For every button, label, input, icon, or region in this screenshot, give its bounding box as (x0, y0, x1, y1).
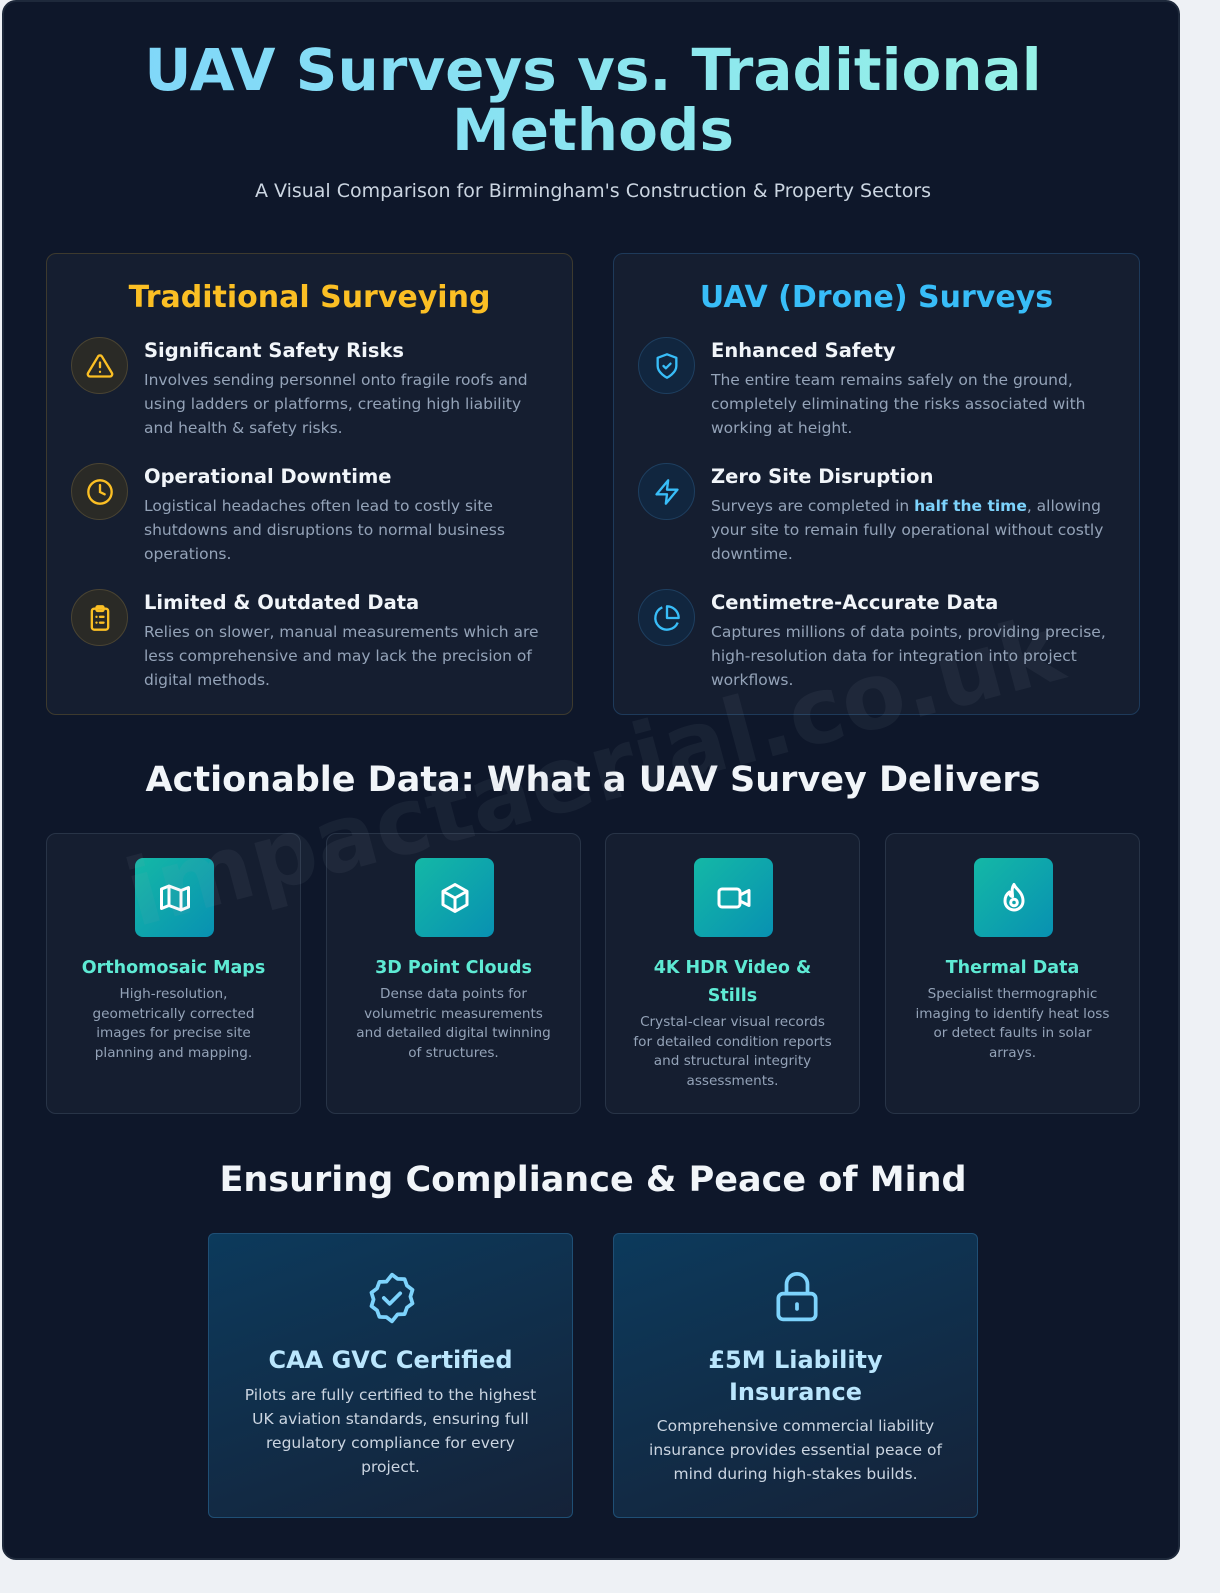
item: outdated data (71, 589, 539, 689)
card: liability insurance: Insurance (729, 1378, 862, 1406)
item: accurate data: Centimetre-Accurate Data (711, 591, 998, 614)
icon: flame (974, 858, 1053, 937)
card: liability insurance: £5M Liability (708, 1346, 883, 1374)
icon: map (135, 858, 214, 937)
card: thermal: Specialist thermographic imaging to identify heat loss or detect faults in solar arrays. (916, 986, 1109, 1061)
icon: video camera (694, 858, 773, 937)
item: outdated data: Limited & Outdated Data (144, 591, 419, 614)
title (4, 40, 1182, 160)
item: zero disruption: Surveys are completed in half the time, allowing your site to remain fully operational without costly downtime. (711, 497, 1103, 563)
item: enhanced safety (638, 337, 1085, 437)
subtitle: A Visual Comparison for Birmingham's Construction & Property Sectors (255, 180, 931, 202)
heading: traditional: Traditional Surveying (129, 280, 490, 315)
title: Methods (452, 96, 734, 164)
item: downtime: Logistical headaches often lead to costly site shutdowns and disruptions to normal business operations. (144, 497, 505, 563)
card: video (605, 833, 860, 1114)
card: thermal: Thermal Data (946, 958, 1079, 978)
icon: badge check (370, 1272, 414, 1324)
card: liability insurance: Comprehensive commercial liability insurance provides essential peace of mind during high-stakes builds. (649, 1417, 942, 1483)
card: liability insurance (613, 1233, 978, 1518)
item: safety risks: Involves sending personnel onto fragile roofs and using ladders or platforms, creating high liability and health & safety risks. (144, 371, 528, 437)
heading: actionable data: Actionable Data: What a UAV Survey Delivers (146, 760, 1040, 800)
panel: UAV surveys (613, 253, 1140, 715)
card: point clouds (326, 833, 581, 1114)
card: orthomosaic: High-resolution, geometrically corrected images for precise site planning and mapping. (93, 986, 254, 1061)
card: CAA certified: Pilots are fully certified to the highest UK aviation standards, ensuring full regulatory compliance for every project. (245, 1386, 536, 1476)
card: point clouds: Dense data points for volumetric measurements and detailed digital twinning of structures. (356, 986, 551, 1061)
item: accurate data: Captures millions of data points, providing precise, high-resolution data for integration into project workflows. (711, 623, 1106, 689)
icon: lock (776, 1272, 818, 1322)
card: orthomosaic (46, 833, 301, 1114)
card: CAA certified: CAA GVC Certified (268, 1346, 513, 1374)
card: video: Crystal-clear visual records for detailed condition reports and structural integrity assessments. (633, 1014, 832, 1089)
item: outdated data: Relies on slower, manual measurements which are less comprehensive and may lack the precision of digital methods. (144, 623, 539, 689)
item: safety risks (71, 337, 528, 437)
card: orthomosaic: Orthomosaic Maps (82, 958, 265, 978)
card: point clouds: 3D Point Clouds (375, 958, 532, 978)
item: downtime: Operational Downtime (144, 465, 391, 488)
item: enhanced safety: Enhanced Safety (711, 339, 896, 362)
watermark: impactaerial.co.uk (115, 595, 1073, 948)
item: zero disruption: Zero Site Disruption (711, 465, 933, 488)
card: video: Stills (708, 986, 757, 1006)
item: safety risks: Significant Safety Risks (144, 339, 404, 362)
heading: compliance: Ensuring Compliance & Peace of Mind (219, 1160, 967, 1200)
item: zero disruption (638, 463, 1103, 563)
card: video: 4K HDR Video & (654, 958, 811, 978)
item: accurate data (638, 589, 1106, 689)
heading: UAV: UAV (Drone) Surveys (700, 280, 1053, 315)
icon: cube (415, 858, 494, 937)
title: UAV Surveys vs. Traditional (144, 36, 1042, 104)
card: thermal (885, 833, 1140, 1114)
item: downtime (71, 463, 505, 563)
card: CAA certified (208, 1233, 573, 1518)
panel: traditional surveying (46, 253, 573, 715)
item: enhanced safety: The entire team remains safely on the ground, completely eliminating the risks associated with working at height. (711, 371, 1085, 437)
